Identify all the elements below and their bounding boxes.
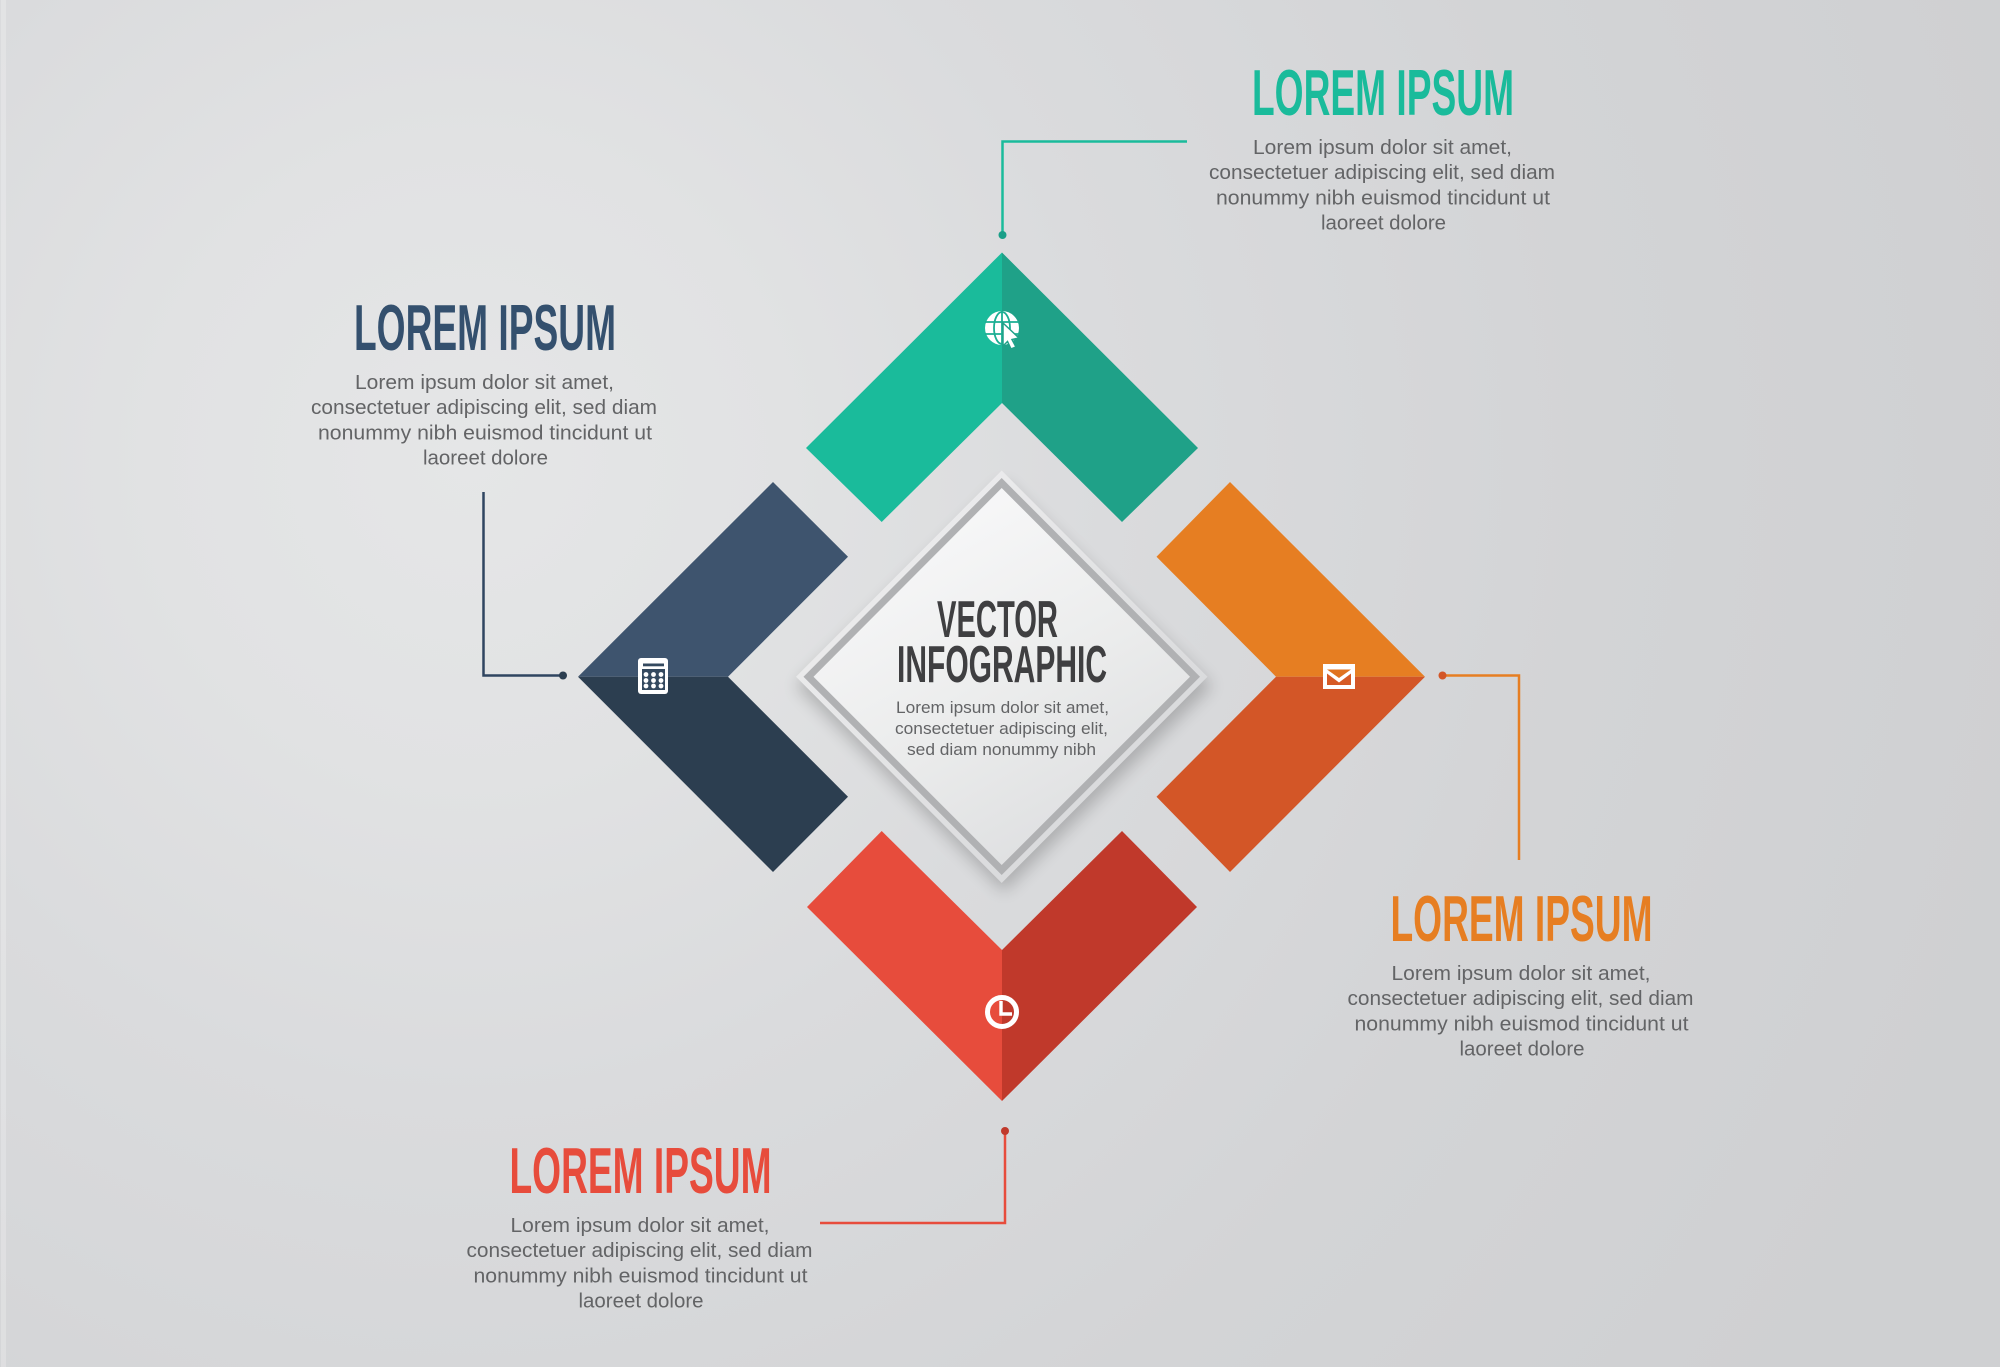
panel: centre diamond bbox=[796, 470, 1212, 892]
body: orange: nonummy nibh euismod tincidunt ut bbox=[1354, 1012, 1689, 1036]
icon: globe with cursor bbox=[985, 311, 1019, 349]
body: teal: consectetuer adipiscing elit, sed diam bbox=[1209, 161, 1555, 184]
body: orange: laoreet dolore bbox=[1460, 1038, 1584, 1060]
icon: calculator bbox=[638, 658, 668, 694]
heading: teal: LOREM IPSUM bbox=[1252, 57, 1514, 129]
text: centre description: sed diam nonummy nibh bbox=[907, 740, 1096, 759]
body: red: Lorem ipsum dolor sit amet, bbox=[510, 1214, 770, 1237]
panel: navy chevron bbox=[578, 482, 848, 872]
panel: teal chevron bbox=[806, 252, 1198, 522]
body: teal: nonummy nibh euismod tincidunt ut bbox=[1216, 186, 1550, 210]
body: navy: Lorem ipsum dolor sit amet, bbox=[355, 371, 614, 394]
text block: orange bbox=[1348, 883, 1694, 1060]
body: navy: nonummy nibh euismod tincidunt ut bbox=[318, 422, 652, 444]
icon: clock bbox=[988, 998, 1016, 1026]
body: orange bbox=[1348, 962, 1694, 1060]
body: orange: Lorem ipsum dolor sit amet, bbox=[1392, 962, 1650, 985]
body: orange: consectetuer adipiscing elit, sed diam bbox=[1348, 987, 1694, 1010]
body: teal: laoreet dolore bbox=[1321, 212, 1446, 234]
title: vector infographic: INFOGRAPHIC bbox=[897, 636, 1107, 694]
heading: red: LOREM IPSUM bbox=[510, 1135, 772, 1207]
body: navy: consectetuer adipiscing elit, sed diam bbox=[311, 396, 657, 419]
icon: envelope bbox=[1323, 664, 1355, 689]
title: vector infographic bbox=[897, 591, 1107, 694]
body: red: consectetuer adipiscing elit, sed diam bbox=[466, 1239, 812, 1262]
body: red bbox=[466, 1214, 812, 1312]
text: centre description bbox=[895, 698, 1109, 759]
callout: teal connector bbox=[998, 142, 1187, 239]
text block: teal bbox=[1209, 57, 1555, 234]
panel: orange chevron bbox=[1156, 482, 1425, 872]
text: centre description: consectetuer adipiscing elit, bbox=[895, 719, 1108, 738]
body: red: laoreet dolore bbox=[578, 1290, 704, 1312]
text block: navy bbox=[311, 292, 657, 470]
callout: orange connector bbox=[1438, 672, 1519, 860]
text: centre description: Lorem ipsum dolor sit amet, bbox=[896, 698, 1109, 717]
panel: red chevron bbox=[807, 831, 1197, 1101]
heading: navy: LOREM IPSUM bbox=[354, 292, 616, 364]
body: navy bbox=[311, 371, 657, 470]
title: vector infographic: VECTOR bbox=[937, 591, 1058, 649]
body: teal bbox=[1209, 136, 1555, 234]
body: red: nonummy nibh euismod tincidunt ut bbox=[474, 1264, 808, 1288]
text block: red bbox=[466, 1135, 812, 1312]
heading: orange: LOREM IPSUM bbox=[1390, 883, 1652, 955]
body: navy: laoreet dolore bbox=[423, 446, 548, 470]
body: teal: Lorem ipsum dolor sit amet, bbox=[1253, 136, 1512, 159]
callout: navy connector bbox=[484, 492, 567, 680]
callout: red connector bbox=[820, 1127, 1009, 1223]
